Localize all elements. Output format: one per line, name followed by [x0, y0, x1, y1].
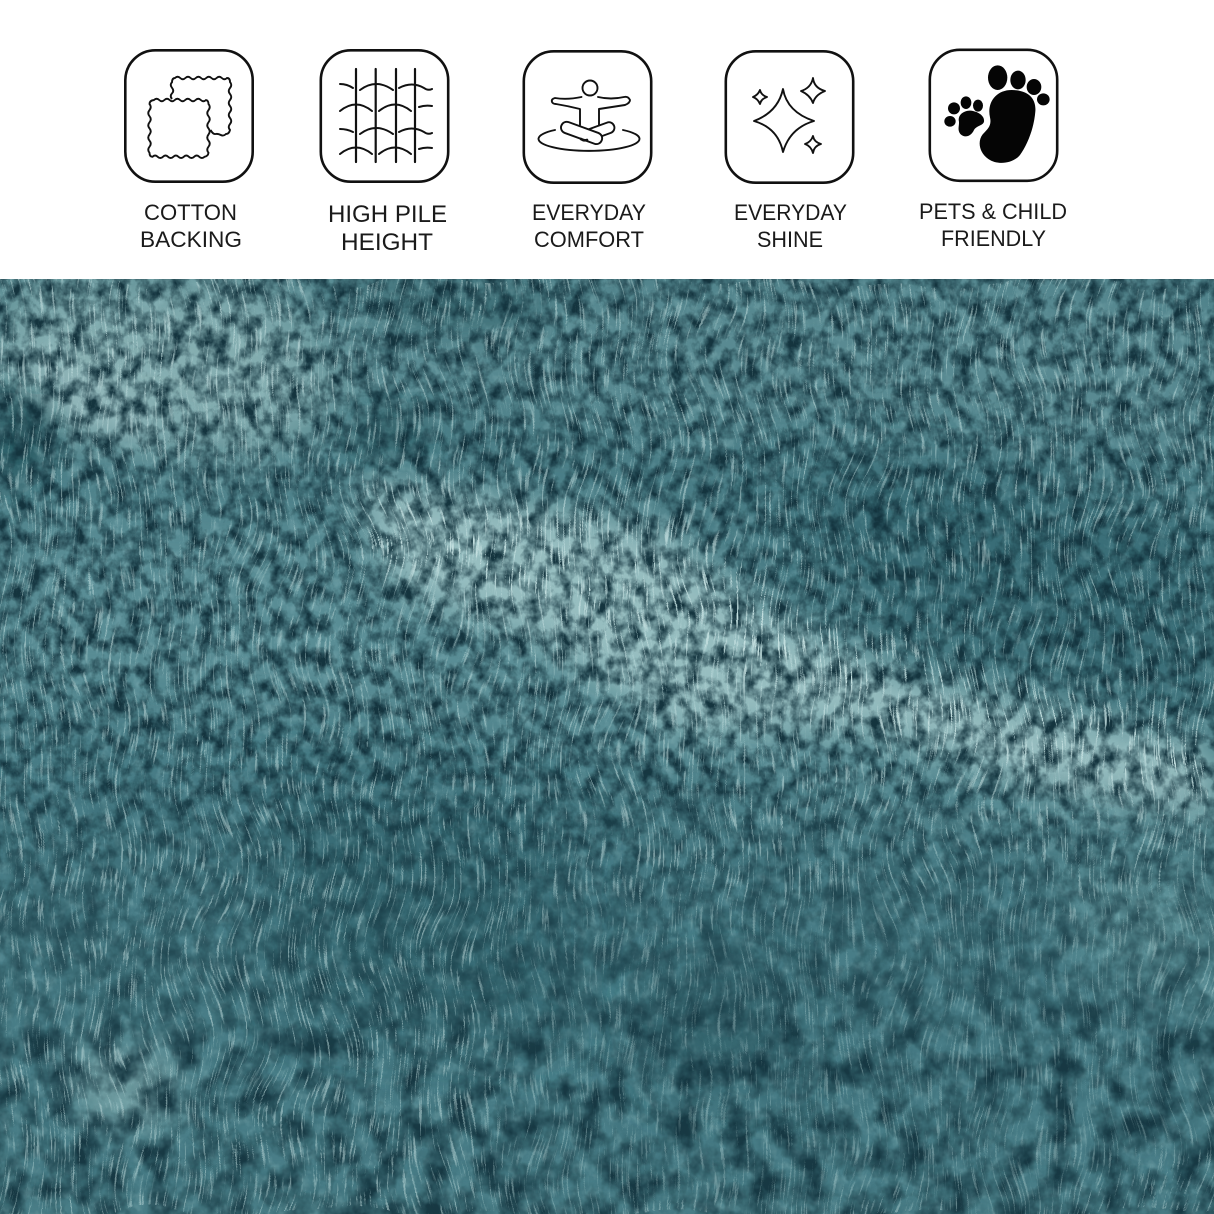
label: high pile height: [328, 201, 447, 256]
label: high pile height: HIGH PILE: [328, 201, 447, 228]
fine glossy fibres: [0, 279, 1214, 1214]
label: cotton backing: BACKING: [140, 227, 242, 252]
label: cotton backing: [140, 200, 242, 252]
label: everyday comfort: EVERYDAY: [532, 200, 646, 225]
icon: high pile height: [321, 50, 448, 182]
label: pets and child friendly: PETS & CHILD: [919, 199, 1067, 224]
icon: cotton backing: [125, 50, 253, 182]
label: pets and child friendly: FRIENDLY: [941, 226, 1046, 251]
icon: everyday comfort: [524, 51, 651, 183]
label: everyday comfort: [532, 200, 646, 252]
label: everyday comfort: COMFORT: [534, 227, 644, 252]
label: everyday shine: SHINE: [757, 227, 823, 252]
icon: pets and child friendly: [930, 50, 1057, 181]
label: everyday shine: EVERYDAY: [734, 200, 847, 225]
label: high pile height: HEIGHT: [341, 229, 433, 256]
label: cotton backing: COTTON: [144, 200, 237, 225]
label: pets and child friendly: [919, 199, 1067, 251]
panel: white header strip: [0, 0, 1214, 279]
icon: everyday shine: [726, 51, 853, 183]
label: everyday shine: [734, 200, 847, 252]
low-frequency light and shadow patches of the pile: [0, 279, 1214, 1214]
rug photo: [0, 279, 1214, 1214]
